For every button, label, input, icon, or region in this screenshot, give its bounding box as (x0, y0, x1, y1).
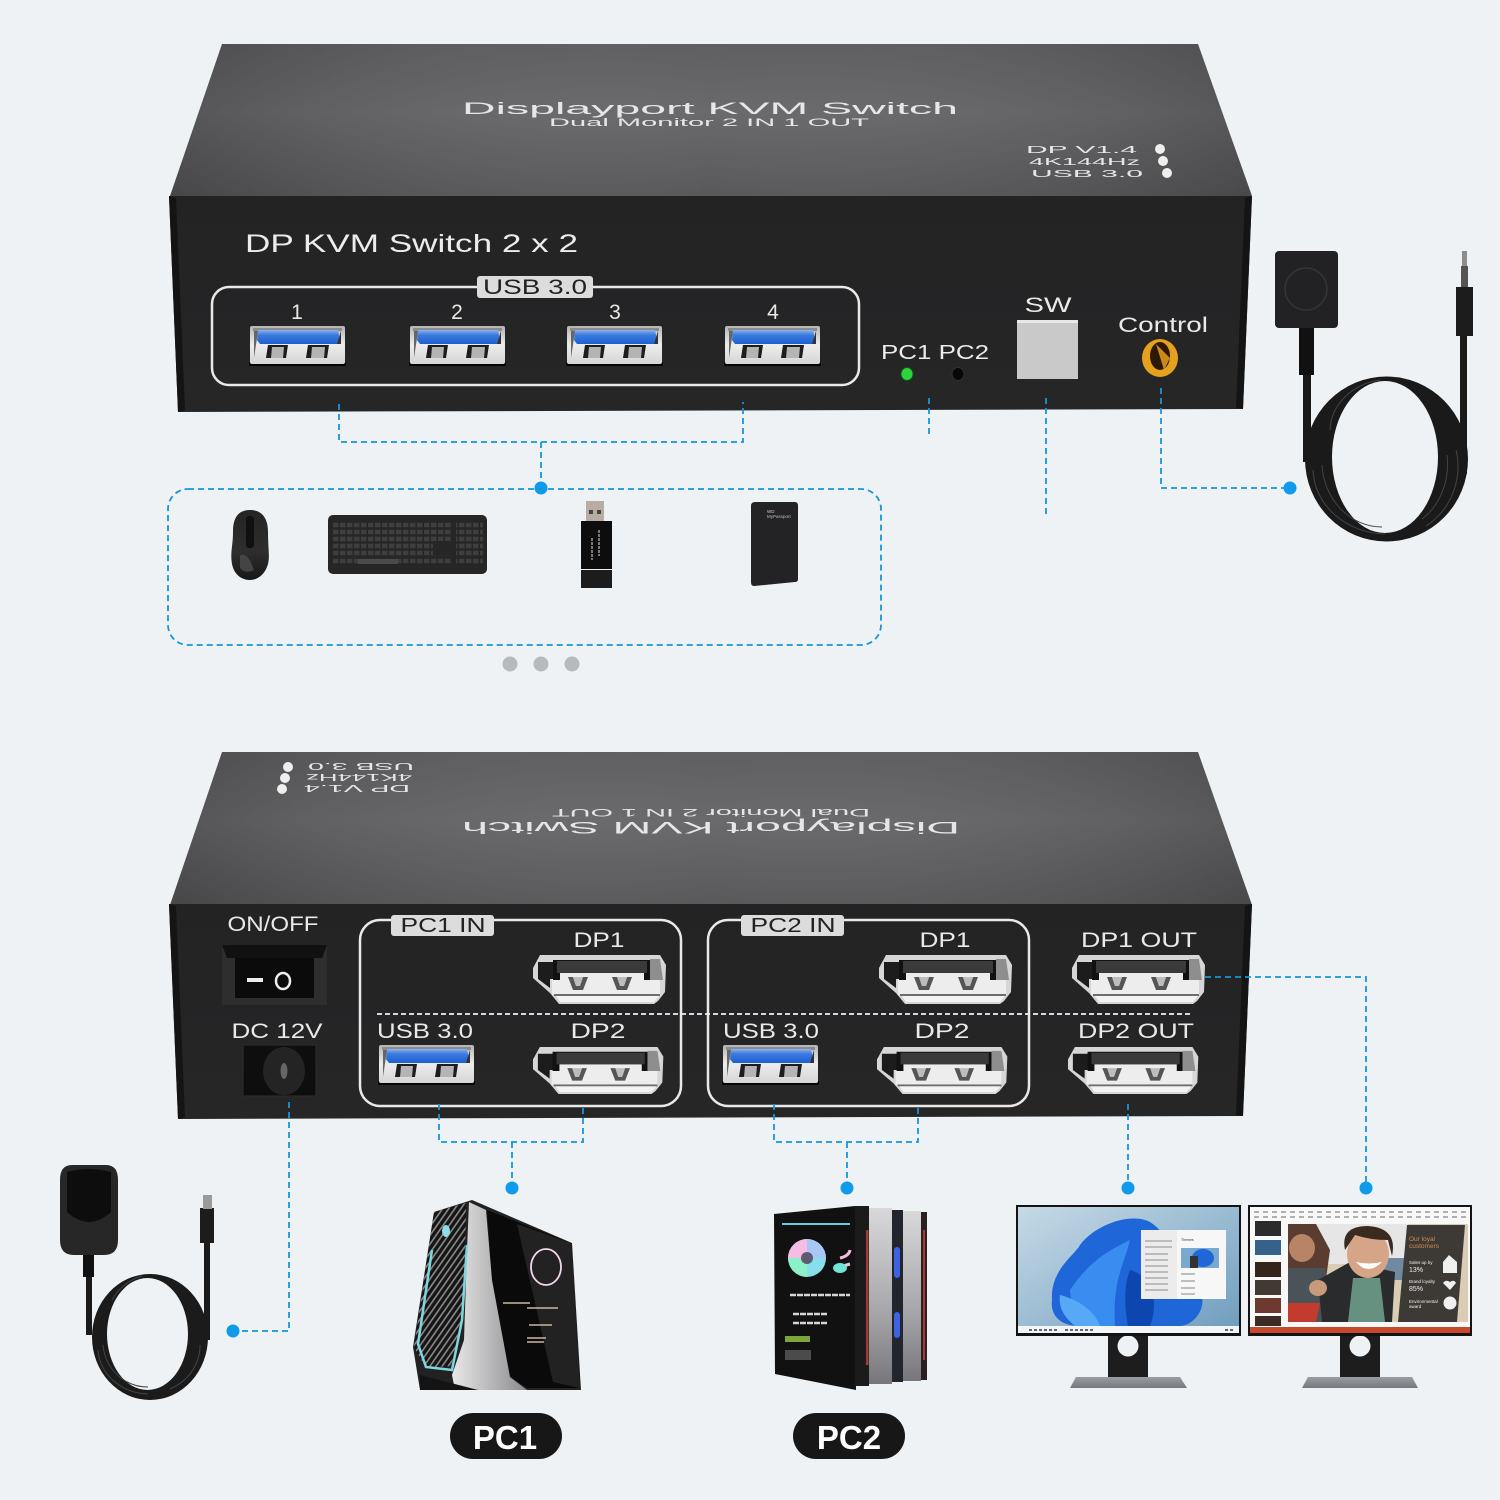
left monitor base (1070, 1377, 1187, 1388)
front frame (855, 1206, 869, 1386)
slide editor window (1250, 1207, 1470, 1333)
lower KVM switch: rear view (169, 752, 1252, 1119)
spec list on lid: DP V1.4 (1026, 145, 1138, 156)
PC2 IN group: PC2 IN (750, 915, 836, 937)
glass side panel (487, 1210, 580, 1388)
3.5mm plug (1456, 251, 1473, 336)
USB 3.0 port group: 1 (291, 301, 303, 324)
coil highlight (1313, 380, 1458, 534)
connector lines: PC1 (439, 1104, 583, 1188)
slide info panel: 85% (1409, 1286, 1423, 1293)
top face of switch (170, 44, 1252, 196)
PC1 IN group: DP2 (570, 1020, 626, 1043)
right monitor (1248, 1205, 1472, 1388)
DC 12V jack: DC 12V (232, 1020, 322, 1043)
SW button (1017, 294, 1078, 379)
connector line: PC LEDs (928, 398, 930, 438)
spec list on lid: 4K144Hz (1029, 157, 1140, 168)
icon: portable drive (751, 502, 798, 586)
connector dot: remote (1284, 482, 1296, 494)
status bar (1250, 1327, 1470, 1333)
PC2 IN group: USB 3.0 (723, 1020, 819, 1043)
centre vent (892, 1210, 903, 1382)
glass panel (774, 1206, 856, 1390)
adapter coil (92, 1274, 208, 1400)
PC2 label pill (793, 1413, 905, 1459)
striped front panel (414, 1203, 466, 1368)
connector dot: PC1 (506, 1182, 518, 1194)
slide info panel: 13% (1409, 1267, 1423, 1274)
silver spine (452, 1202, 527, 1390)
cable coil (1305, 376, 1468, 542)
remote strain relief (1299, 328, 1314, 375)
inverted lid title (462, 806, 960, 837)
DC plug (200, 1195, 214, 1243)
ellipsis dots (502, 656, 580, 672)
product title on lid: Displayport KVM Switch (462, 99, 958, 118)
left monitor cable hole (1118, 1336, 1138, 1356)
icon: keyboard (328, 515, 487, 574)
top KVM switch: front view (169, 44, 1252, 412)
settings window: Themes (1181, 1238, 1194, 1242)
DP1 OUT port: DP1 OUT (1081, 929, 1197, 952)
top cyan light (782, 1223, 850, 1225)
silver panel one (869, 1208, 892, 1384)
connector line: SW button (1045, 398, 1047, 518)
SW button: SW (1024, 294, 1072, 317)
connector lines from USB ports (339, 402, 743, 488)
left wallpaper (1018, 1207, 1239, 1333)
slide thumbnails (1255, 1221, 1281, 1326)
PC1 label pill (450, 1413, 562, 1459)
left monitor (1016, 1205, 1241, 1388)
connector dot: right monitor (1360, 1182, 1372, 1194)
cyan light strip (418, 1245, 467, 1370)
product title on lid: Dual Monitor 2 IN 1 OUT (549, 117, 870, 129)
icon: portable drive: MyPassport (767, 514, 792, 519)
rear side flanges (169, 904, 1252, 1119)
taskbar (1018, 1326, 1239, 1333)
cyan cooler part (833, 1263, 847, 1273)
inverted spec list: DP V1.4 (303, 782, 410, 793)
inverted spec list (277, 760, 414, 794)
PC1 IN group: DP1 (574, 929, 624, 952)
left monitor neck (1108, 1335, 1148, 1378)
inverted lid title: Displayport KVM Switch (462, 818, 960, 837)
USB device dashed frame (168, 489, 881, 645)
connector line: DC jack to adapter (233, 1102, 289, 1331)
inverted spec list: 4K144Hz (306, 771, 412, 782)
slide info panel: award (1409, 1304, 1422, 1309)
blue vent glow (894, 1250, 900, 1335)
product title on lid (462, 99, 958, 129)
cable to DC plug (204, 1240, 210, 1340)
power switch: ON/OFF (228, 913, 318, 936)
internal parts (503, 1303, 558, 1342)
DP2 OUT port (1068, 1020, 1198, 1094)
spec list on lid (1026, 144, 1172, 180)
PC1 PC2 indicator lights: PC1 PC2 (881, 342, 989, 364)
rear edge (921, 1212, 927, 1380)
cooler (838, 1250, 850, 1268)
adapter glossy face (67, 1169, 111, 1222)
connector line: DP1 OUT to right monitor (1205, 977, 1366, 1188)
glass reflection (517, 1224, 580, 1388)
PC2 label pill: PC2 (817, 1419, 881, 1456)
control jack (1118, 314, 1208, 377)
PC2 IN group: DP2 (914, 1020, 970, 1043)
DC 12V jack (232, 1020, 322, 1096)
connector line: control jack to remote (1161, 388, 1290, 488)
PC2 IN group (708, 915, 1029, 1106)
side flanges (169, 196, 1252, 412)
inverted lid title: Dual Monitor 2 IN 1 OUT (551, 806, 870, 818)
connector dot: PC2 (840, 1182, 854, 1194)
connector dot: USB devices (534, 482, 548, 494)
slide info panel: Brand loyalty (1409, 1279, 1436, 1284)
ribbon (1254, 1212, 1468, 1217)
USB 3.0 port group: USB 3.0 (483, 276, 587, 299)
PC1 IN group: PC1 IN (400, 915, 486, 937)
rear red trim (923, 1230, 925, 1360)
silver panel two (903, 1211, 921, 1381)
GPU green bar (785, 1336, 810, 1342)
connector dot: adapter (226, 1324, 240, 1338)
USB 3.0 port group: 2 (451, 301, 463, 324)
slide info panel: Our loyal (1409, 1236, 1436, 1243)
right monitor cable hole (1350, 1336, 1370, 1356)
PC1 label pill: PC1 (473, 1419, 537, 1456)
PC1 IN group: USB 3.0 (377, 1020, 473, 1043)
internal components (790, 1295, 850, 1323)
tower base body (413, 1200, 581, 1390)
icon: portable drive: WD (767, 509, 775, 514)
cable to plug (1460, 334, 1467, 474)
PC1 IN group (360, 915, 681, 1106)
power switch (222, 913, 327, 1005)
USB 3.0 port group: 4 (767, 301, 779, 324)
adapter strain relief (83, 1255, 94, 1277)
front panel title: DP KVM Switch 2 x 2 (245, 230, 578, 258)
control jack: Control (1118, 314, 1208, 337)
DP2 OUT port: DP2 OUT (1078, 1020, 1194, 1043)
remote button ring (1285, 268, 1327, 310)
motherboard detail (785, 1350, 811, 1360)
slide info panel: customers (1409, 1243, 1440, 1250)
blue bloom wallpaper (1052, 1219, 1202, 1326)
adapter coil highlight (98, 1276, 200, 1394)
connector dot: left monitor (1122, 1182, 1134, 1194)
rear panel (169, 904, 1252, 1119)
slide photo (1288, 1224, 1468, 1322)
right monitor bezel (1248, 1205, 1472, 1336)
slide info panel: Sales up by (1409, 1260, 1433, 1265)
remote body (1275, 251, 1338, 328)
front panel (169, 196, 1252, 412)
PC2 tower (774, 1206, 927, 1390)
spec list on lid: USB 3.0 (1031, 169, 1144, 180)
right monitor base (1302, 1377, 1418, 1388)
red trim (866, 1230, 868, 1365)
taskbar icons (1029, 1329, 1235, 1331)
slide info panel (1398, 1225, 1465, 1322)
top face of rear switch (170, 752, 1252, 905)
adapter body (60, 1165, 118, 1255)
DP1 OUT port (1072, 929, 1205, 1004)
PC1 tower (413, 1200, 581, 1390)
inverted spec list: USB 3.0 (307, 760, 414, 771)
icon: USB flash drive (581, 501, 612, 588)
USB 3.0 port group (212, 276, 859, 385)
power adapter with cable (60, 1165, 214, 1400)
PC2 IN group: DP1 (920, 929, 970, 952)
cable to adapter (86, 1275, 92, 1335)
left monitor bezel (1016, 1205, 1241, 1336)
right monitor neck (1340, 1335, 1380, 1378)
feet (420, 1375, 478, 1390)
USB 3.0 port group: 3 (609, 301, 621, 324)
PC1 PC2 indicator lights (881, 342, 989, 380)
cable to remote (1303, 372, 1311, 462)
icon: mouse (231, 510, 269, 580)
RGB fan (788, 1239, 826, 1277)
RGB ring (531, 1249, 561, 1285)
connector lines: PC2 (774, 1104, 918, 1188)
slide info panel: Environmental (1409, 1299, 1438, 1304)
wired remote button with cable (1275, 251, 1473, 542)
logo (442, 1225, 450, 1237)
settings window (1141, 1230, 1226, 1299)
connector line: DP2 OUT to left monitor (1127, 1104, 1129, 1188)
